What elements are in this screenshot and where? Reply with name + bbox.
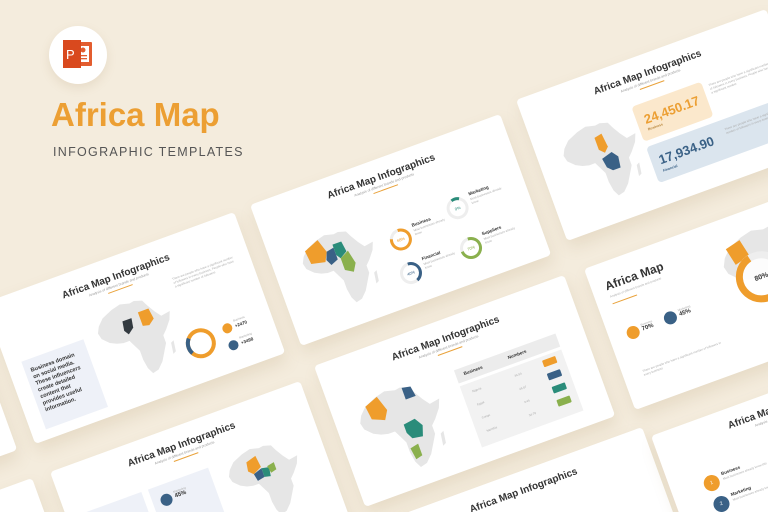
- table: 3.45: [523, 398, 530, 404]
- item 2: 2: [719, 501, 724, 507]
- slide: bottom left infographics: Analysis of different brands and products: [154, 440, 215, 466]
- number box: business: 24,450.17: [642, 93, 701, 127]
- ring: financial: Most businesses already know: [423, 251, 455, 270]
- table: Congo: [481, 413, 491, 420]
- map with ring 80%: [724, 226, 768, 302]
- ring: suppliers: 70%: [466, 244, 476, 252]
- table: Egypt: [476, 400, 485, 406]
- map: [98, 300, 176, 373]
- item 2: [714, 482, 768, 512]
- table: 34.78: [528, 411, 537, 417]
- slide: ring charts: [250, 114, 551, 346]
- stat: 70%: 70%: [641, 323, 655, 333]
- text box: [21, 339, 108, 429]
- table: [454, 334, 584, 448]
- slide title: Africa Map Infographics: [126, 420, 237, 469]
- slide: africa map percentages: [584, 178, 768, 410]
- box: marketing: Marketing: [173, 486, 186, 494]
- stat: 45%: 45%: [679, 308, 692, 318]
- ring: business: Most businesses already know: [413, 217, 445, 236]
- slide: blank left partial: [0, 309, 17, 512]
- ring: business: Business: [411, 216, 431, 228]
- ring: marketing: 9%: [454, 205, 462, 212]
- table: Numbers: [507, 349, 527, 360]
- slide: africa map percentages: Analysis of different brands and products: [609, 276, 662, 299]
- donut chart: [186, 328, 216, 358]
- slide title: Africa Map Infographics: [61, 252, 171, 301]
- ring: marketing: [446, 185, 502, 219]
- text box: Business domain on social media. These influencers create detailed content that provides useful information.: [30, 352, 83, 413]
- ring: suppliers: [460, 225, 515, 259]
- ring: financial: [400, 250, 455, 284]
- ring: business: [390, 216, 445, 250]
- stat: business: Business: [232, 315, 245, 323]
- table: 34.90: [514, 372, 522, 378]
- number box: financial: [646, 96, 768, 183]
- paragraph: There are people who have a significant number of followers in every business. People who have a significant number of followers: [172, 255, 234, 289]
- map: [564, 122, 642, 196]
- slide: business domain: [0, 212, 285, 444]
- ring: suppliers: Most businesses already know: [483, 226, 515, 245]
- number box: financial: Financial: [662, 164, 678, 173]
- slide: table: Analysis of different brands and products: [418, 334, 479, 360]
- item 1: [704, 461, 767, 492]
- slide title: Africa Map Infographics: [390, 314, 501, 363]
- box: marketing: 45%: [174, 490, 187, 500]
- table: Nigeria: [472, 386, 482, 393]
- slide: table: [314, 275, 615, 507]
- stat: marketing: +3498: [240, 336, 254, 345]
- slide: bottom center: [392, 427, 693, 512]
- paragraph: There are people who have a significant number of followers in every business: [642, 341, 722, 377]
- slide: ring charts: Analysis of different brands and products: [354, 172, 415, 198]
- ring: business: 68%: [396, 236, 406, 243]
- table: 46.67: [519, 385, 527, 391]
- item 1: Business: [720, 465, 741, 476]
- ring: marketing: Marketing: [468, 185, 489, 196]
- box: marketing: [148, 468, 235, 512]
- slide title: Africa Map: [603, 259, 665, 293]
- stat: 70%: [626, 319, 655, 339]
- ring: marketing: Most businesses already know: [470, 186, 502, 205]
- slide: big numbers: [516, 9, 768, 241]
- ring: financial: 40%: [406, 269, 416, 277]
- box: business: [81, 492, 169, 512]
- item 1: Most businesses already know this: [722, 461, 767, 481]
- stat: marketing: Marketing: [239, 331, 252, 340]
- ring: financial: Financial: [421, 250, 441, 261]
- ring: suppliers: Suppliers: [481, 225, 502, 236]
- icon: powerpoint badge: [49, 26, 107, 84]
- stat: business: +2470: [234, 319, 248, 328]
- table: Business: [463, 365, 483, 376]
- icon: powerpoint badge: P: [66, 47, 75, 62]
- slide: business domain: Analysis of different brands and products: [88, 272, 149, 297]
- stat: marketing: [228, 331, 254, 350]
- stat: 45%: Marketing: [677, 304, 691, 312]
- map: [229, 446, 297, 512]
- stat: business: [222, 315, 248, 334]
- number box: business: [631, 82, 714, 142]
- map: [303, 232, 379, 302]
- title: Africa Map: [51, 96, 220, 133]
- map: [360, 386, 446, 467]
- number box: financial: 17,934.90: [657, 133, 716, 167]
- item 2: Marketing: [730, 485, 752, 497]
- slide: bottom left infographics: [50, 381, 351, 512]
- item 1: 1: [709, 480, 714, 486]
- slide: numbered list: [651, 345, 768, 512]
- slide title: Africa Map Infographics: [326, 152, 437, 202]
- slide title: Africa Map Infographics: [592, 48, 703, 97]
- subtitle: INFOGRAPHIC TEMPLATES: [53, 145, 244, 159]
- slide: blank left partial 2: [0, 478, 83, 512]
- number box: business: Business: [647, 122, 663, 131]
- table: Namibia: [486, 425, 498, 433]
- slide: big numbers: Analysis of different brands and products: [620, 68, 681, 94]
- stat: 45%: [664, 304, 692, 324]
- stat: 70%: Business: [640, 319, 653, 327]
